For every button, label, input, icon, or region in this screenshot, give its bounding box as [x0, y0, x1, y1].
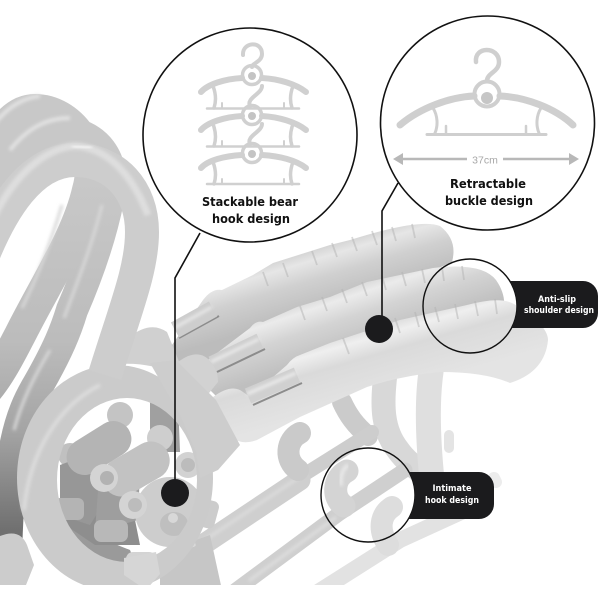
middle arm: [179, 266, 504, 396]
connector line to bear hook dot: [175, 233, 200, 490]
front bear: [119, 452, 222, 590]
arm ridges: [263, 224, 497, 354]
icon: single hanger: [400, 50, 573, 134]
dimension arrow: [393, 153, 579, 165]
label: Retractable: [450, 177, 526, 191]
bears: [54, 402, 222, 590]
label: Stackable bear: [202, 195, 298, 209]
badge label: shoulder design: [524, 306, 594, 316]
front arm: [213, 300, 548, 442]
back hooks and rings: [0, 96, 110, 560]
callout: retractable buckle design: [380, 16, 594, 230]
middle bear: [90, 425, 177, 542]
label: hook design: [212, 212, 290, 226]
marker dot: bear hook: [161, 479, 189, 507]
marker dot: shoulder: [365, 315, 393, 343]
lower bars, legs and small hooks: [195, 372, 496, 592]
connector line to shoulder dot: [382, 183, 398, 330]
badge label: hook design: [425, 496, 479, 506]
callout: stackable bear hook design: [143, 28, 357, 242]
callout: intimate hook design: [321, 448, 494, 542]
badge label: Intimate: [432, 484, 472, 494]
second ring joint: [126, 327, 179, 366]
back bear: [58, 402, 133, 524]
label: buckle design: [445, 194, 533, 208]
dimension label: 37cm: [472, 154, 498, 166]
badge label: Anti-slip: [538, 295, 576, 305]
icon: three stacked hangers: [201, 44, 306, 184]
inner ring shadows behind bears: [66, 402, 180, 562]
callout: anti-slip shoulder design: [423, 259, 598, 353]
product photo: stacked grey hangers: [0, 96, 548, 592]
bear front paw over ring: [124, 552, 160, 585]
back arm: [171, 224, 454, 362]
front hook and ring: [0, 146, 240, 591]
